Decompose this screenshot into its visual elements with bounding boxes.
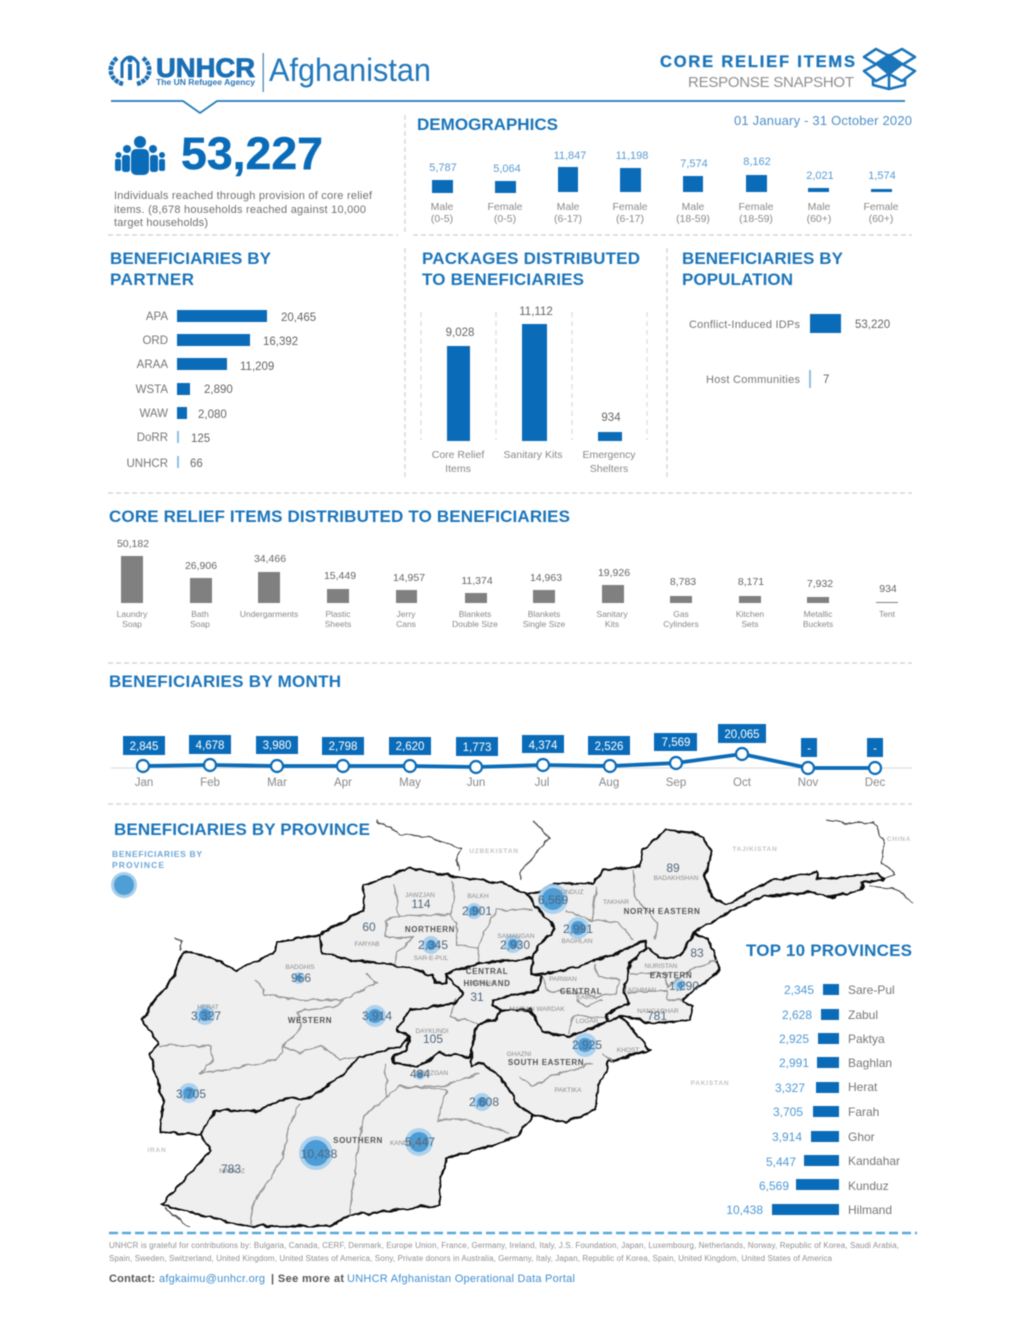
bar chart: items: 14,963 [530,572,562,584]
bar chart: partners [126,310,316,470]
line chart: months: 2,526 [595,741,623,753]
line chart: months: Apr [334,777,352,789]
map: neighbouring country labels: PAKISTAN [691,1080,729,1087]
map: province labels: TAKHAR [603,899,629,906]
map: province labels: KANDAHAR [390,1140,426,1147]
line chart: months: 4,374 [529,740,558,752]
bar chart: packages: 9,028 [446,327,474,339]
header: report title: RESPONSE SNAPSHOT [688,74,854,91]
province boundaries [160,870,717,1225]
map: province labels: NANGARHAR [637,1008,679,1015]
bar chart: population: 53,220 [855,319,890,331]
bar chart: items: Jerry [397,609,416,619]
map: province labels: BAGHLAN [561,938,593,945]
bar chart: demographics: Male [808,201,831,213]
bar chart: top provinces: Kandahar [848,1154,900,1168]
bar chart: items: Sets [741,619,759,629]
header: report title: CORE RELIEF ITEMS [660,53,855,71]
country outline [142,830,883,1226]
bar chart: top provinces: Paktya [848,1032,885,1046]
line chart: months: 2,798 [329,741,357,753]
bar chart: demographics: 1,574 [868,170,896,182]
panel: headline figure [114,128,373,229]
line chart: months: 7,569 [662,737,690,749]
map: province labels: KUNDUZ [556,889,584,896]
footer: contact line: Contact: [109,1273,155,1285]
map: region labels: NORTHERN [405,925,455,934]
map: province values: 5,447 [405,1135,435,1149]
footer: contact line [109,1273,575,1285]
map: province values: 2,991 [563,922,593,936]
bar chart: items: 50,182 [117,538,149,550]
map: region labels [288,907,700,1145]
bar chart: items: 8,783 [670,576,696,588]
bar chart: items: 8,171 [738,576,764,588]
bar chart: partners: 11,209 [240,361,274,373]
bar chart: items: 14,957 [393,572,425,584]
map: proportional circles [179,884,686,1170]
bar chart: packages: Items [445,463,471,475]
panel: beneficiaries by province [111,820,914,1227]
map: province values: 783 [221,1162,241,1176]
map: province labels [197,875,699,1175]
heading: BENEFICIARIES BY MONTH [109,672,341,691]
bar chart: demographics: Female [863,201,899,213]
map: province labels: KHOST [617,1047,639,1054]
bar chart: items: Sanitary [596,609,628,619]
bar chart: packages [421,306,647,475]
map: province labels: LOGAR [576,1018,599,1025]
map legend: BENEFICIARIES BY [112,849,202,859]
map: province values: 10,438 [301,1147,338,1161]
bar chart: packages: Sanitary Kits [504,449,562,461]
map: province labels: BAMYAN [470,980,497,987]
map: province labels: HERAT [197,1004,219,1011]
bar chart: demographics: 8,162 [743,156,771,168]
bar chart: top provinces: Herat [848,1080,878,1094]
map: province values: 2,608 [469,1095,499,1109]
line chart: months [111,724,912,789]
map: province labels: SAR-E-PUL [414,955,449,962]
bar chart: demographics: Female [612,201,648,213]
bar chart: demographics [429,150,899,225]
line chart: months: Mar [267,777,287,789]
panel: top 10 provinces [726,941,912,1217]
map: region labels: NORTH EASTERN [624,907,700,916]
bar chart: items: Double Size [452,619,498,629]
bar chart: population: Conflict-Induced IDPs [689,319,800,331]
heading [422,249,640,289]
bar chart: items: Kits [605,619,619,629]
bar chart: items: Bath [191,609,209,619]
map: region labels: HIGHLAND [463,979,511,988]
date range: 01 January - 31 October 2020 [734,113,912,128]
line chart: months: 3,980 [263,740,291,752]
icon: UNHCR emblem [111,57,149,84]
footer: contact line: afgkaimu@unhcr.org [159,1273,265,1285]
footer: donor acknowledgement: Spain, Sweden, Switzerland, United Kingdom, United States of America, Sony, Private donors in Australia, Germany, Italy, Japan, Republic of Korea, Spain, United Kingdom, United States of America [109,1254,833,1263]
bar chart: items: Plastic [325,609,351,619]
bar chart: demographics: Male [431,201,454,213]
bar chart: items: Gas [673,609,689,619]
bar chart: items [117,538,898,629]
bar chart: top provinces: Baghlan [848,1056,892,1070]
bar chart: top provinces: Sare-Pul [848,983,895,997]
footer: donor acknowledgement [109,1241,899,1263]
bar chart: items: 34,466 [254,553,286,565]
map: region labels: CENTRAL [466,967,508,976]
map: province values: 6,569 [538,893,568,907]
bar chart: top provinces: 10,438 [726,1203,763,1217]
bar chart: items: 934 [879,583,897,595]
map: province values: 83 [690,946,704,960]
bar chart: demographics: 5,064 [493,163,521,175]
map: Afghanistan regions [142,820,914,1227]
bar chart: demographics: Male [557,201,580,213]
line chart: months: 2,845 [130,741,158,753]
bar chart: partners: WAW [139,408,168,420]
bar chart: partners: UNHCR [126,458,168,470]
bar chart: top provinces: Ghor [848,1130,875,1144]
bar chart: top provinces: Kunduz [848,1179,889,1193]
heading: TOP 10 PROVINCES [746,941,912,960]
heading [110,249,272,289]
map: province values: 2,930 [500,938,530,952]
map: neighbouring country labels: UZBEKISTAN [469,848,519,855]
line chart: months: 20,065 [724,729,760,741]
map legend: PROVINCE [112,860,164,870]
bar chart: items: Blankets [459,609,491,619]
map: province values: 114 [411,897,431,911]
map: province labels: JAWZJAN [405,892,435,899]
map: province values: 31 [470,990,484,1004]
bar chart: demographics: (18-59) [739,213,773,225]
line chart: months: Jul [535,777,549,789]
bar chart: top provinces: 2,991 [779,1056,809,1070]
map: province values: 89 [666,861,680,875]
map: province values: 2,925 [572,1038,602,1052]
map: province labels: BADGHIS [285,964,315,971]
line chart: months: Sep [666,777,686,789]
bar chart: items: 19,926 [598,567,630,579]
bar chart: items: Blankets [528,609,560,619]
map: province values: 781 [647,1009,667,1023]
bar chart: demographics: 11,847 [554,150,586,162]
bar chart: partners: 2,890 [204,384,233,396]
bar chart: top provinces: Hilmand [848,1203,892,1217]
map: region labels: EASTERN [650,971,692,980]
footer: donor acknowledgement: UNHCR is grateful for contributions by: Bulgaria, Canada, CERF, Denmark, Europe Union, France, Germany, Ireland, Italy, J.S. Foundation, Japan, Luxembourg, Netherlands, Norway, Republic of Korea, Saudi Arabia, [109,1241,899,1250]
bar chart: items: Kitchen [736,609,764,619]
line chart: months: Dec [865,777,885,789]
bar chart: partners: 125 [191,433,210,445]
header rule with notch [111,101,905,113]
bar chart: top provinces: 3,705 [773,1105,803,1119]
line chart: months: Aug [599,777,619,789]
bar chart: demographics: 11,198 [616,150,648,162]
bar chart: packages: 934 [601,412,621,424]
bar chart: partners: 2,080 [198,409,227,421]
bar chart: partners: WSTA [136,384,168,396]
map: province values: 2,901 [462,904,492,918]
map: province values: 956 [291,971,311,985]
heading: TO BENEFICIARIES [422,270,584,289]
map: province values: 60 [362,920,376,934]
description [114,190,373,229]
icon: open box [864,49,915,89]
map: province labels: BADAKHSHAN [654,875,699,882]
bar chart: demographics: (60+) [869,213,893,225]
bar chart: population: Host Communities [706,374,800,386]
heading: DEMOGRAPHICS [417,115,558,134]
bar chart: demographics: (6-17) [554,213,582,225]
panel: packages distributed [421,249,647,475]
map: province values [176,861,704,1176]
bar chart: demographics: (0-5) [431,213,453,225]
bar chart: demographics: 5,787 [429,162,457,174]
map: province labels: DAYKUNDI [415,1028,449,1035]
bar chart: items: Cylinders [663,619,699,629]
heading: PARTNER [110,270,194,289]
bar chart: partners: 16,392 [263,336,298,348]
bar chart: top provinces [726,983,900,1217]
bar chart: top provinces: Farah [848,1105,879,1119]
big number: 53,227 [181,128,323,179]
bar chart: top provinces: 3,914 [772,1130,802,1144]
bar chart: items: 7,932 [807,578,833,590]
bar chart: partners: 66 [190,458,203,470]
map: province labels: LAGHMAN [624,987,656,994]
line chart: months: 4,678 [196,740,224,752]
map: neighbouring country labels [147,836,911,1154]
map: province labels: NIMROZ [219,1168,245,1175]
line chart: months: Jan [135,777,153,789]
bar chart: items: Soap [122,619,142,629]
panel: beneficiaries by month [109,672,912,789]
bar chart: demographics: Female [487,201,523,213]
line chart: months: 1,773 [463,742,491,754]
header: report title [660,53,855,91]
bar chart: top provinces: 6,569 [759,1179,789,1193]
bar chart: items: Metallic [804,609,833,619]
icon: people group [115,136,165,175]
description: Individuals reached through provision of core relief [114,190,373,202]
heading: PACKAGES DISTRIBUTED [422,249,640,268]
map: region labels: SOUTHERN [333,1136,383,1145]
map: province labels: GHAZNI [507,1051,531,1058]
map: province labels: URUZGAN [416,1070,448,1077]
heading: CORE RELIEF ITEMS DISTRIBUTED TO BENEFICIARIES [109,507,570,526]
bar chart: partners: 20,465 [281,312,316,324]
map: region labels: WESTERN [288,1016,332,1025]
heading: BENEFICIARIES BY [682,249,844,268]
footer: contact line: | See more at [271,1273,344,1285]
bar chart: partners: APA [146,311,168,323]
bar chart: demographics: 2,021 [806,170,834,182]
line chart: months: Feb [200,777,220,789]
panel: demographics [417,113,912,225]
heading: BENEFICIARIES BY [110,249,272,268]
bar chart: items: Soap [190,619,210,629]
bar chart: partners: ARAA [137,359,168,371]
bar chart: packages: Core Relief [432,449,484,461]
bar chart: items: Single Size [523,619,566,629]
bar chart: top provinces: 5,447 [766,1155,796,1169]
map: province labels: PAKTIKA [555,1087,582,1094]
map: neighbouring country labels: IRAN [147,1147,167,1154]
country title: Afghanistan [269,52,431,88]
bar chart: items: Sheets [325,619,351,629]
bar chart: demographics: Male [682,201,705,213]
line chart: months: - [807,743,811,755]
bar chart: demographics: (60+) [807,213,831,225]
map: neighbouring country labels: TAJIKISTAN [732,846,778,853]
line chart: months: 2,620 [396,741,424,753]
bar chart: items: Laundry [117,609,148,619]
map: province values: 3,327 [191,1009,221,1023]
map: province values: 1,290 [669,979,699,993]
bar chart: demographics: (6-17) [616,213,644,225]
line chart: months: May [399,777,421,789]
bar chart: demographics: 7,574 [680,158,708,170]
bar chart: demographics: (18-59) [676,213,710,225]
bar chart: partners: DoRR [137,432,168,444]
header: logo and country title [111,52,431,92]
line chart: months: - [873,743,877,755]
heading: BENEFICIARIES BY PROVINCE [114,820,370,839]
map: province labels: BALKH [467,893,489,900]
neighbouring borders [165,820,914,1227]
map: province labels: FARYAB [354,941,380,948]
bar chart: items: 15,449 [324,570,356,582]
bar chart: top provinces: 2,345 [784,983,814,997]
map: province labels: KABUL [576,994,598,1001]
map: province labels: NURISTAN [645,963,678,970]
description: items. (8,678 households reached against 10,000 [114,204,366,216]
map: region labels: SOUTH EASTERN [508,1058,584,1067]
bar chart: top provinces: Zabul [848,1008,878,1022]
logo tagline: The UN Refugee Agency [156,78,256,87]
bar chart: demographics: Female [738,201,774,213]
bar chart: population: 7 [823,374,829,386]
bar chart: top provinces: 3,327 [775,1081,805,1095]
panel: beneficiaries by partner [110,249,316,470]
bar chart: packages: Shelters [590,463,628,475]
map: province values: 2,345 [418,938,448,952]
bar chart: top provinces: 2,628 [782,1008,812,1022]
regional boundaries [200,893,693,1135]
map legend [111,849,202,898]
bar chart: items: Cans [396,619,416,629]
map: province labels: SAMANGAN [497,933,535,940]
map: province values: 3,914 [362,1009,392,1023]
map: neighbouring country labels: CHINA [887,836,911,843]
bar chart: top provinces: 2,925 [779,1032,809,1046]
heading [682,249,844,289]
bar chart: packages: Emergency [582,449,636,461]
UNHCR wordmark: UNHCR [156,53,255,83]
map: province labels: MAIDAN WARDAK [509,1006,565,1013]
map: province values: 3,705 [176,1087,206,1101]
panel: core relief items distributed [109,507,898,629]
bar chart: partners: ORD [142,335,168,347]
panel: beneficiaries by population [682,249,890,388]
line chart: months: Jun [467,777,485,789]
line chart: months: Nov [798,777,818,789]
bar chart: packages: 11,112 [519,306,553,318]
bar chart: items: Undergarments [240,609,298,619]
bar chart: items: Buckets [803,619,833,629]
map: province values: 484 [410,1067,430,1081]
heading: POPULATION [682,270,793,289]
bar chart: population [689,314,890,388]
bar chart: items: Tent [879,609,896,619]
map: region labels: CENTRAL [560,987,602,996]
footer: contact line: UNHCR Afghanistan Operational Data Portal [347,1273,575,1285]
line chart: months: Oct [733,777,752,789]
description: target households) [114,217,208,229]
bar chart: items: 26,906 [185,560,217,572]
map: province labels: PARWAN [549,976,577,983]
bar chart: items: 11,374 [461,575,493,587]
bar chart: demographics: (0-5) [494,213,516,225]
map: province values: 105 [423,1032,443,1046]
